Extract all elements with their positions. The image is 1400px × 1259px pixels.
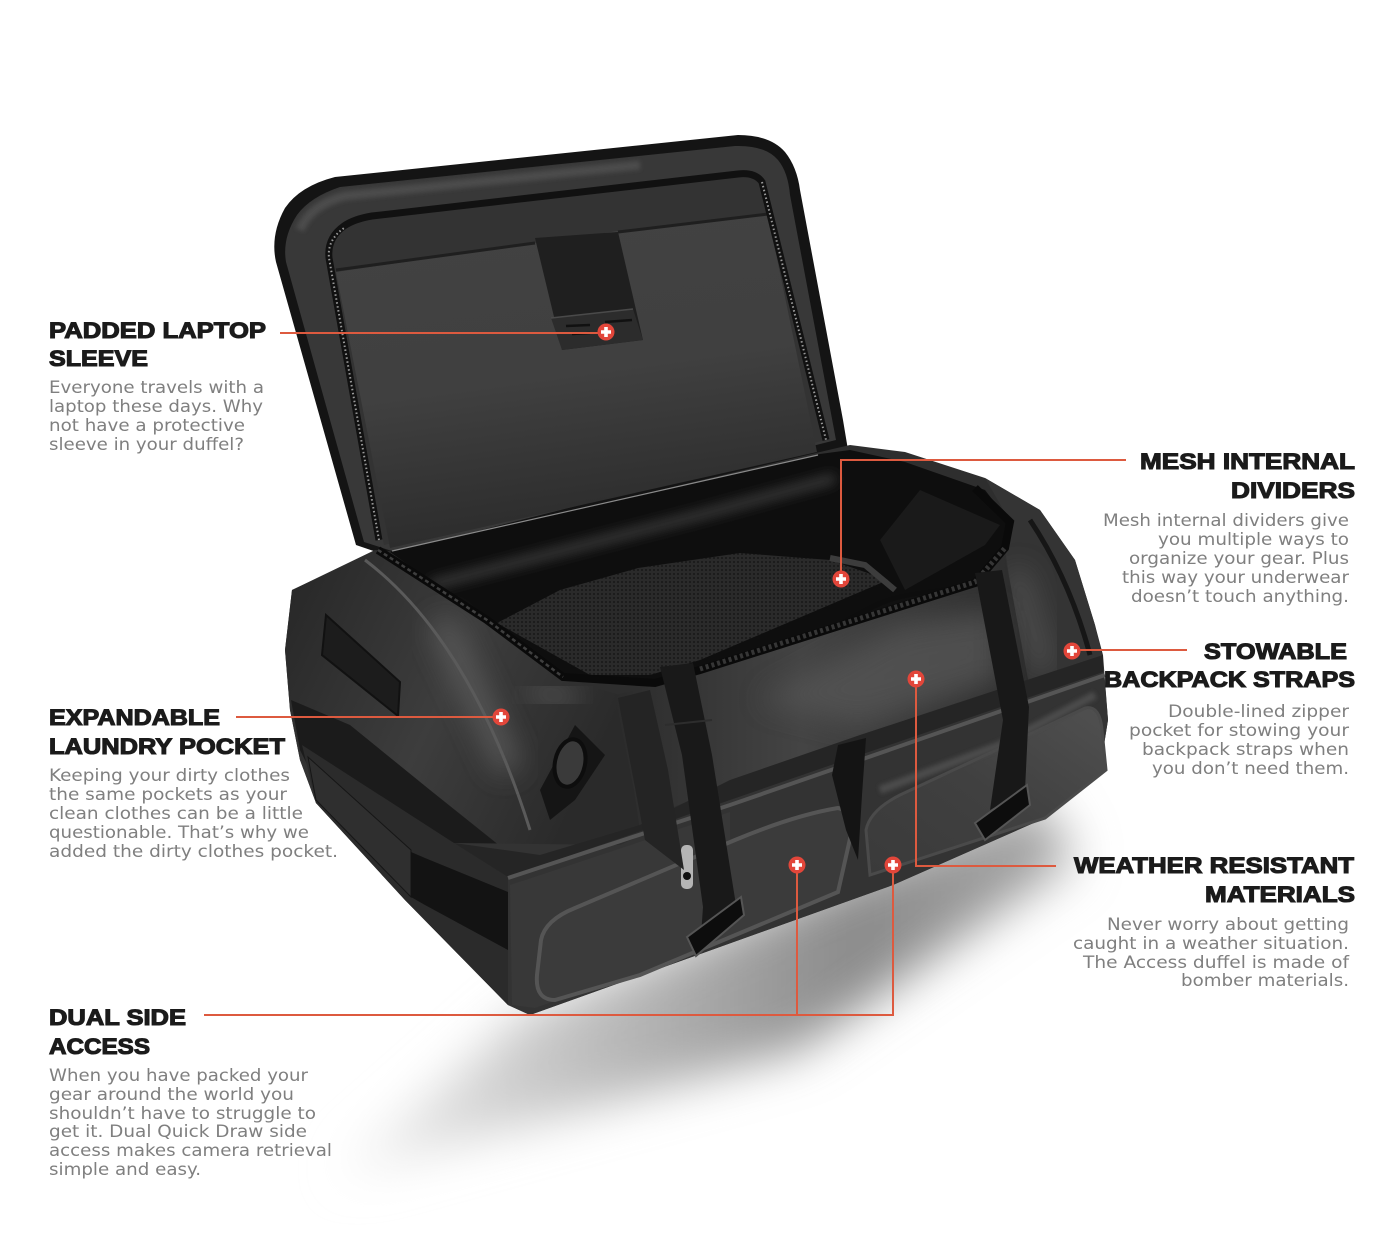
callout: padded laptop sleeve xyxy=(49,318,266,455)
leader lines xyxy=(204,333,1187,1015)
callout: expandable laundry pocket: added the dirty clothes pocket. xyxy=(49,842,338,862)
seam band xyxy=(454,655,1103,877)
zipper pulls and closure xyxy=(681,738,866,889)
duffel bag illustration xyxy=(274,135,1108,1015)
zipper rim xyxy=(378,488,1010,683)
marker: side access right xyxy=(884,856,902,874)
callout: stowable backpack straps: pocket for stowing your xyxy=(1129,721,1349,741)
callout: dual side access: DUAL SIDE xyxy=(49,1005,186,1030)
callout: padded laptop sleeve: laptop these days. Why xyxy=(49,397,263,417)
callout: stowable backpack straps: you don’t need them. xyxy=(1152,759,1349,779)
callout: weather resistant materials: caught in a weather situation. xyxy=(1073,934,1349,954)
laptop pocket panel xyxy=(336,215,817,548)
callout: weather resistant materials: bomber materials. xyxy=(1181,971,1349,991)
callout: weather resistant materials: WEATHER RESISTANT xyxy=(1074,853,1354,878)
left end lower xyxy=(302,745,508,1005)
callout: expandable laundry pocket: Keeping your dirty clothes xyxy=(49,766,290,786)
lower compartment xyxy=(300,655,1108,1015)
callout: dual side access: get it. Dual Quick Draw side xyxy=(49,1122,307,1142)
callout: dual side access: When you have packed your xyxy=(49,1066,308,1086)
callout: mesh internal dividers: DIVIDERS xyxy=(1231,478,1355,503)
callout: mesh internal dividers: Mesh internal dividers give xyxy=(1103,511,1349,531)
callout: padded laptop sleeve: not have a protective xyxy=(49,416,245,436)
d-ring xyxy=(540,725,605,820)
callout: stowable backpack straps: backpack straps when xyxy=(1142,740,1349,760)
callout: padded laptop sleeve: sleeve in your duffel? xyxy=(49,435,244,455)
front upper panel xyxy=(615,555,1030,820)
logo patch xyxy=(322,615,400,716)
callout: expandable laundry pocket: questionable. That’s why we xyxy=(49,823,309,843)
callout: padded laptop sleeve: PADDED LAPTOP xyxy=(49,318,266,343)
callout: weather resistant materials xyxy=(1073,853,1355,991)
callout: padded laptop sleeve: Everyone travels with a xyxy=(49,378,264,398)
callout: stowable backpack straps: Double-lined zipper xyxy=(1168,702,1349,722)
callout: expandable laundry pocket: clean clothes can be a little xyxy=(49,804,303,824)
callout: stowable backpack straps xyxy=(1104,639,1355,779)
callout: expandable laundry pocket xyxy=(49,705,338,862)
marker: backpack straps xyxy=(1064,642,1080,660)
marker: laundry pocket xyxy=(492,708,510,726)
callout: expandable laundry pocket: LAUNDRY POCKET xyxy=(49,734,285,759)
callout: stowable backpack straps: BACKPACK STRAPS xyxy=(1104,667,1355,692)
front pockets xyxy=(510,812,730,1008)
callout: expandable laundry pocket: the same pockets as your xyxy=(49,785,287,805)
mesh divider xyxy=(497,553,888,675)
lid zipper xyxy=(329,174,826,540)
callout: dual side access: access makes camera retrieval xyxy=(49,1141,332,1161)
callout: mesh internal dividers: organize your gear. Plus xyxy=(1129,549,1349,569)
callout: expandable laundry pocket: EXPANDABLE xyxy=(49,705,220,730)
callout: weather resistant materials: The Access duffel is made of xyxy=(1082,953,1350,973)
callout: weather resistant materials: MATERIALS xyxy=(1205,882,1355,907)
callout: mesh internal dividers: doesn’t touch anything. xyxy=(1131,587,1349,607)
callout: mesh internal dividers: you multiple ways to xyxy=(1158,530,1349,550)
ground shadow xyxy=(340,800,1075,1175)
marker: mesh dividers xyxy=(832,570,850,588)
callout: mesh internal dividers: this way your underwear xyxy=(1122,568,1349,588)
open lid xyxy=(274,135,848,560)
right end of bag xyxy=(985,478,1103,700)
marker: laptop sleeve xyxy=(598,324,614,340)
callout: dual side access xyxy=(49,1005,332,1180)
callout: stowable backpack straps: STOWABLE xyxy=(1204,639,1347,664)
velcro tab xyxy=(535,232,643,350)
main interior xyxy=(390,450,1012,685)
callout: dual side access: simple and easy. xyxy=(49,1160,201,1180)
callout: mesh internal dividers: MESH INTERNAL xyxy=(1140,449,1355,474)
strap: right xyxy=(975,570,1030,840)
left end panel xyxy=(285,552,640,850)
marker: weather resistant xyxy=(908,670,924,688)
callout: dual side access: shouldn’t have to struggle to xyxy=(49,1104,316,1124)
callout: mesh internal dividers xyxy=(1103,449,1355,607)
callout: padded laptop sleeve: SLEEVE xyxy=(49,346,148,371)
bag silhouette xyxy=(285,445,1108,1015)
strap: left xyxy=(618,663,744,956)
callout: dual side access: ACCESS xyxy=(49,1034,150,1059)
callout: weather resistant materials: Never worry about getting xyxy=(1107,915,1349,935)
callout: dual side access: gear around the world you xyxy=(49,1085,294,1105)
marker: side access left xyxy=(788,856,806,874)
